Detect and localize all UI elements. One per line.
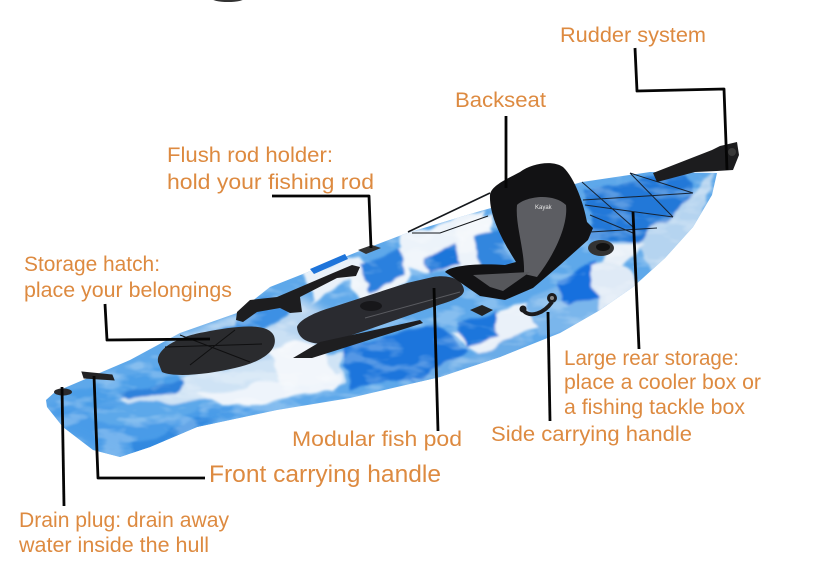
label: flush rod holder: Flush rod holder:: [167, 144, 333, 167]
line: modular fish pod: [434, 288, 438, 431]
rudder system: [653, 142, 739, 182]
label: side carrying handle: Side carrying handle: [491, 423, 692, 446]
line: storage hatch: [105, 304, 210, 340]
flush rod holder: [358, 245, 381, 254]
leader lines: [62, 48, 727, 506]
label: flush rod holder: hold your fishing rod: [167, 171, 374, 194]
line: flush rod holder: [272, 196, 371, 248]
label: large rear storage: Large rear storage:: [564, 347, 739, 370]
label: drain plug: water inside the hull: [18, 534, 209, 557]
backseat: Kayak: [535, 205, 553, 211]
hull body: [46, 172, 717, 457]
label: large rear storage: a fishing tackle box: [564, 396, 745, 419]
label: storage hatch: Storage hatch:: [24, 253, 160, 276]
kayak illustration: [30, 142, 739, 470]
bungee cords: [408, 173, 693, 233]
label: modular fish pod: Modular fish pod: [292, 428, 462, 451]
line: backseat: [505, 116, 507, 188]
label: storage hatch: [24, 253, 232, 302]
side carrying handle: [520, 293, 557, 314]
rod and paddle clip: [236, 254, 360, 322]
label: backseat: Backseat: [455, 89, 546, 112]
label: storage hatch: place your belongings: [24, 279, 232, 302]
label: rudder system: Rudder system: [560, 24, 706, 47]
label: large rear storage: [564, 347, 761, 419]
rear mounts: [470, 240, 614, 316]
top edge fragment: [211, 0, 245, 2]
drain plug: [54, 388, 72, 396]
line: large rear storage: [633, 212, 639, 349]
line: side carrying handle: [548, 312, 550, 421]
label: front carrying handle: Front carrying handle: [209, 461, 441, 488]
front carrying handle: [82, 372, 114, 380]
backseat: [445, 163, 593, 300]
line: rudder system: [635, 48, 727, 170]
line: drain plug: [62, 387, 64, 506]
storage hatch cover: [158, 326, 275, 375]
label: drain plug: [18, 509, 229, 557]
modular fish pod: [293, 276, 464, 358]
label: large rear storage: place a cooler box or: [564, 371, 761, 394]
label: flush rod holder: [167, 144, 374, 194]
label: drain plug: Drain plug: drain away: [19, 509, 229, 532]
line: front carrying handle: [94, 376, 205, 478]
